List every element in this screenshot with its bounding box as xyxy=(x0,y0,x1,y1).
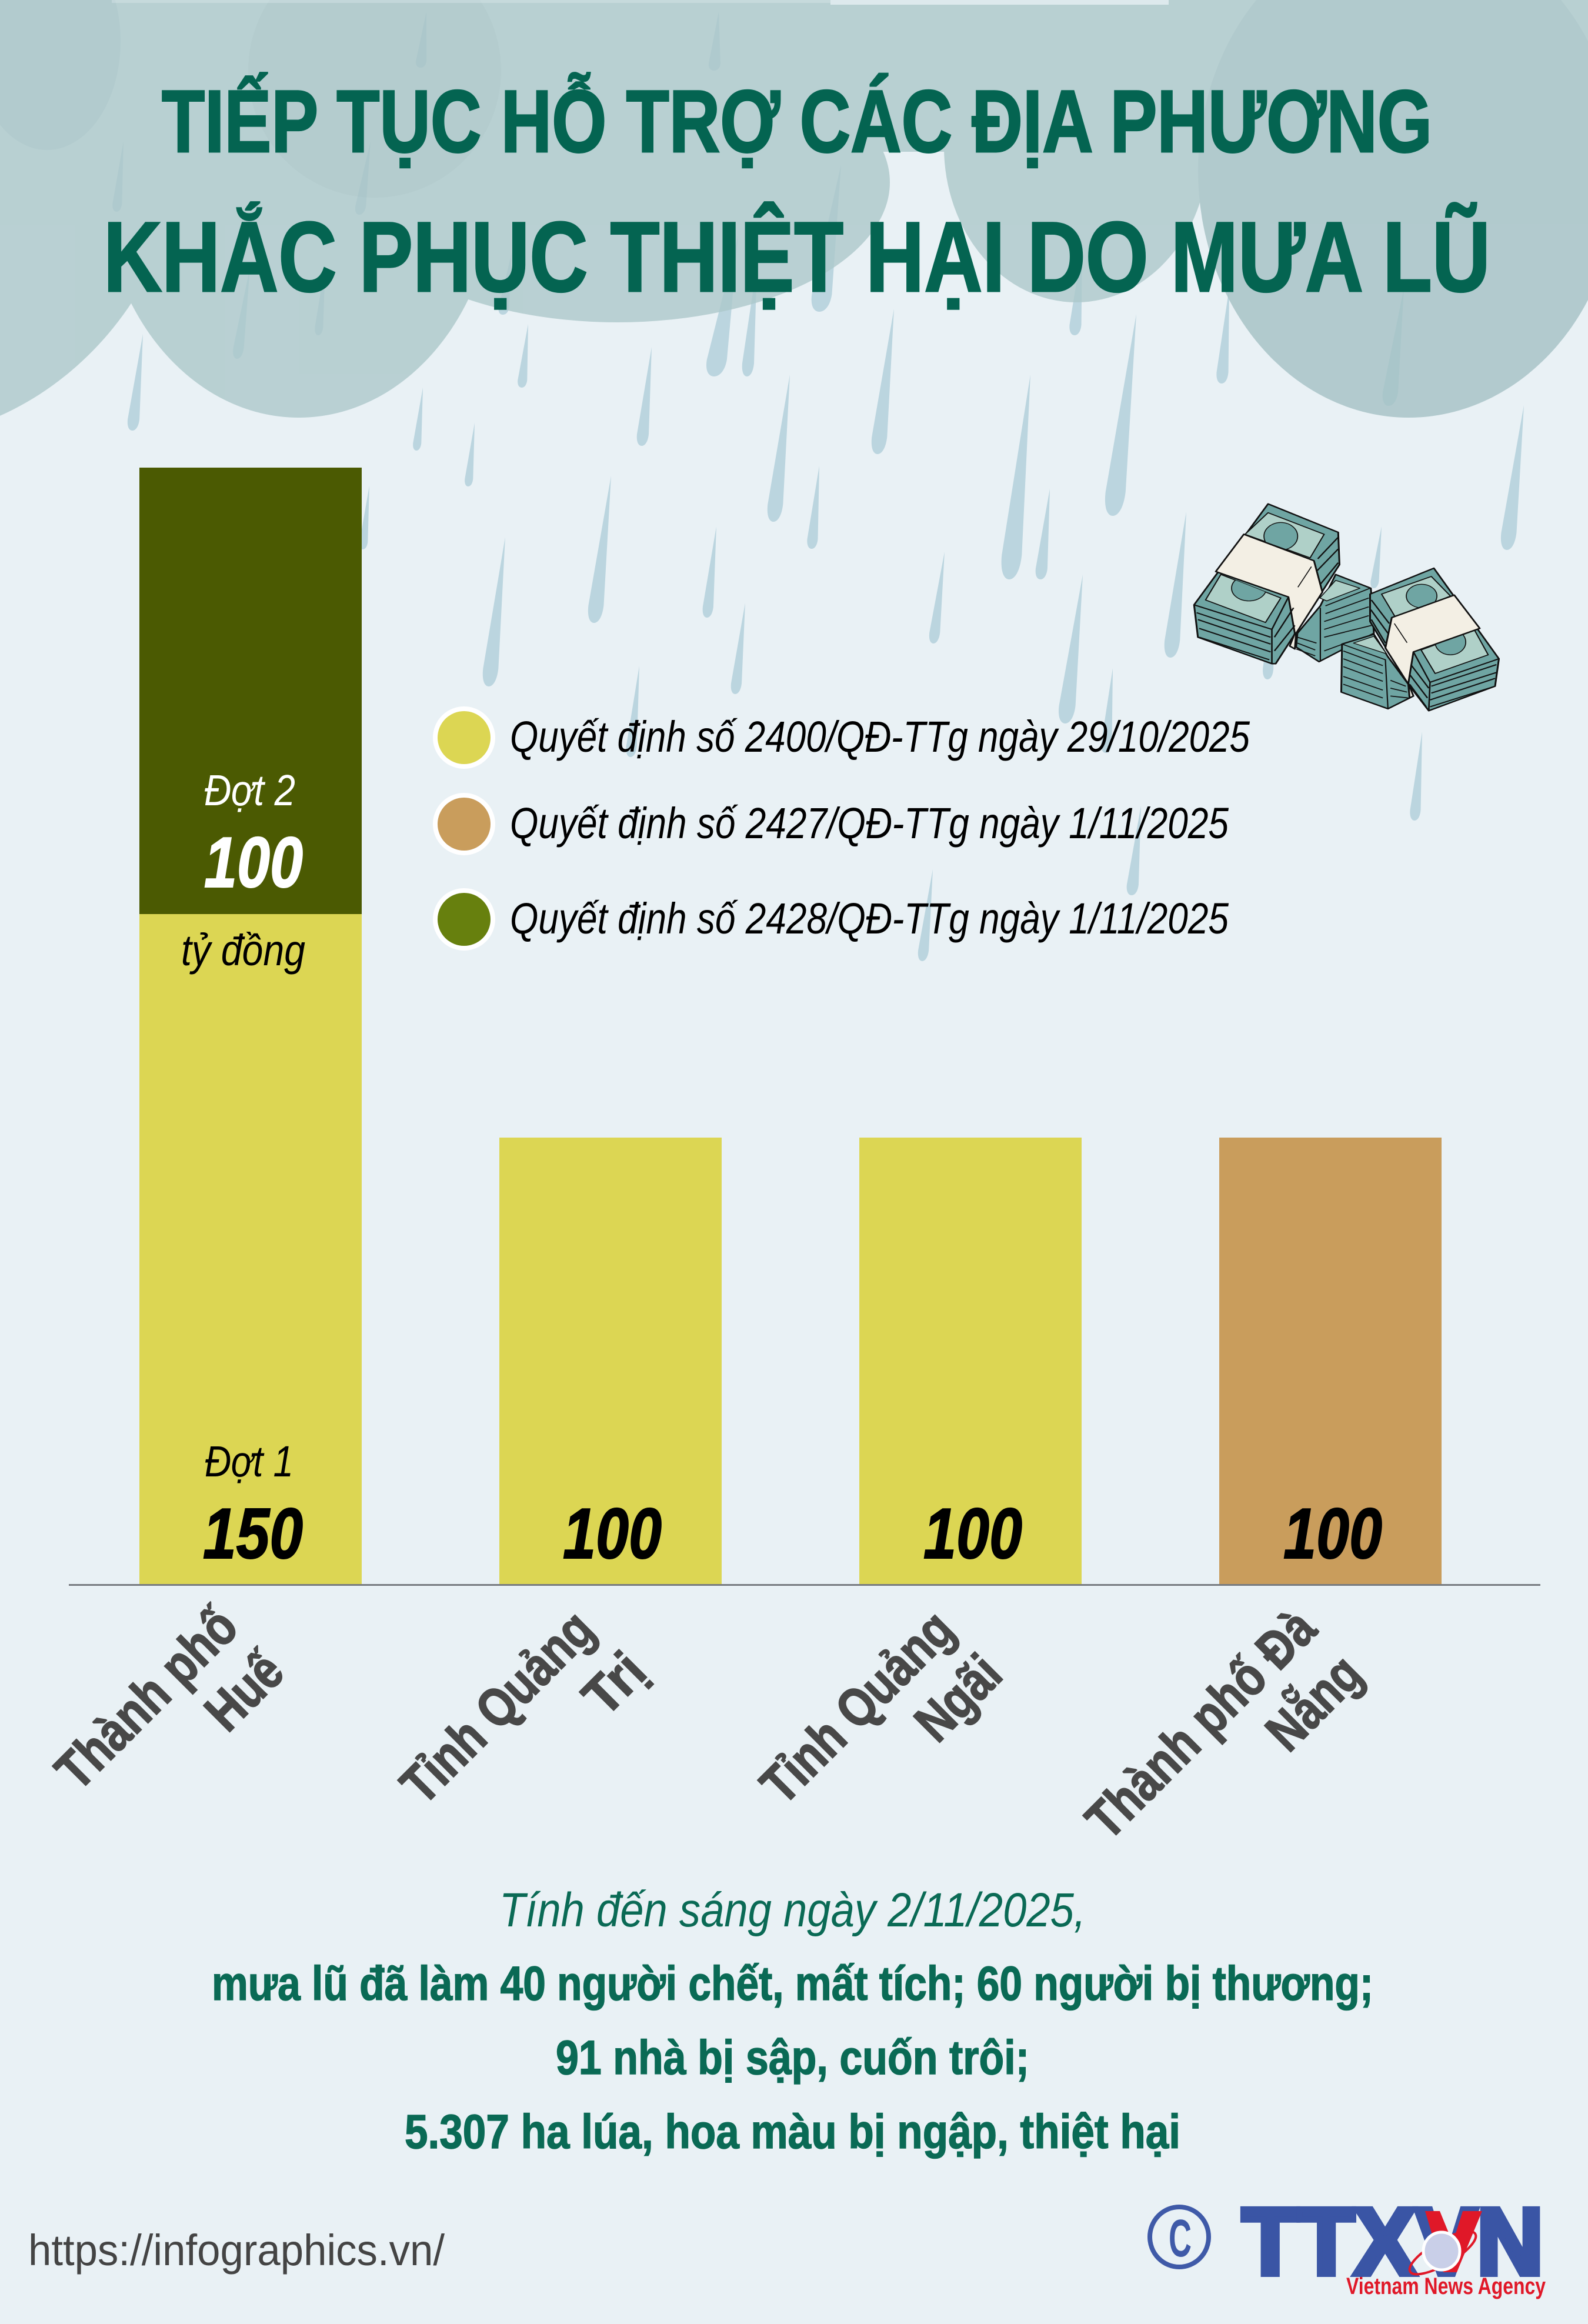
value labels: round 2: Đợt 2 xyxy=(204,766,295,815)
icon: copyright: C xyxy=(1169,2209,1192,2268)
value labels: round 1 xyxy=(203,1437,303,1573)
value labels: other bars xyxy=(563,1493,1382,1573)
legend item: 2428 xyxy=(435,891,1229,948)
value labels: other bars: 100 xyxy=(1283,1493,1382,1573)
logo: TTXVN: TTXVN xyxy=(1242,2189,1543,2294)
summary text: 91 nhà bị sập, cuốn trôi; xyxy=(556,2031,1029,2085)
bar: Thành phố Huế round 2 xyxy=(139,468,362,914)
title xyxy=(104,72,1490,312)
value labels: other bars: 100 xyxy=(923,1493,1022,1573)
source url: https://infographics.vn/ xyxy=(28,2226,445,2275)
category label: Thành phố Huế: Huế xyxy=(194,1641,295,1742)
storm clouds xyxy=(0,0,1588,441)
bar chart xyxy=(44,468,1540,1850)
value labels: other bars: 100 xyxy=(563,1493,662,1573)
category label: Tỉnh Quảng Ngãi: Ngãi xyxy=(903,1643,1013,1753)
category label: Tỉnh Quảng Ngãi: Tỉnh Quảng xyxy=(749,1599,966,1815)
category label: Tỉnh Quảng Trị: Trị xyxy=(571,1641,658,1727)
category label: Thành phố Đà Nẵng: Nẵng xyxy=(1254,1643,1373,1762)
icon: money bundles xyxy=(1194,504,1499,711)
unit label: tỷ đồng xyxy=(181,926,305,975)
value labels: round 2 xyxy=(204,766,303,902)
front left bundle xyxy=(1194,504,1339,663)
value labels: round 1: 150 xyxy=(203,1493,303,1573)
legend item: 2427: Quyết định số 2427/QĐ-TTg ngày 1/11/2025 xyxy=(510,799,1229,848)
legend item: 2400 xyxy=(435,709,1250,766)
legend item: 2427 xyxy=(435,795,1229,853)
value labels: round 1: Đợt 1 xyxy=(205,1437,293,1486)
bar: Tỉnh Quảng Trị xyxy=(499,1138,722,1585)
summary text: Tính đến sáng ngày 2/11/2025, xyxy=(499,1883,1086,1937)
summary text: mưa lũ đã làm 40 người chết, mất tích; 60 người bị thương; xyxy=(212,1957,1373,2010)
category label: Thành phố Huế: Thành phố xyxy=(44,1596,249,1801)
legend item: 2400: Quyết định số 2400/QĐ-TTg ngày 29/10/2025 xyxy=(510,712,1250,761)
legend xyxy=(435,709,1250,948)
summary text xyxy=(212,1883,1373,2159)
bar: Thành phố Huế round 1 xyxy=(139,914,362,1585)
category label: Thành phố Đà Nẵng: Thành phố Đà xyxy=(1075,1598,1327,1850)
legend item: 2428: Quyết định số 2428/QĐ-TTg ngày 1/11/2025 xyxy=(510,894,1229,943)
back middle bundle xyxy=(1296,575,1374,662)
back right bundle xyxy=(1341,634,1410,709)
icon: copyright xyxy=(1150,2207,1209,2268)
category label: Tỉnh Quảng Trị: Tỉnh Quảng xyxy=(389,1599,606,1815)
bar: Thành phố Đà Nẵng xyxy=(1219,1138,1442,1585)
axis line xyxy=(69,1584,1540,1586)
bar: Tỉnh Quảng Ngãi xyxy=(859,1138,1082,1585)
value labels: round 2: 100 xyxy=(204,822,303,902)
rain drops xyxy=(112,12,1532,961)
summary text: 5.307 ha lúa, hoa màu bị ngập, thiệt hại xyxy=(405,2105,1180,2159)
front right bundle xyxy=(1370,568,1499,711)
